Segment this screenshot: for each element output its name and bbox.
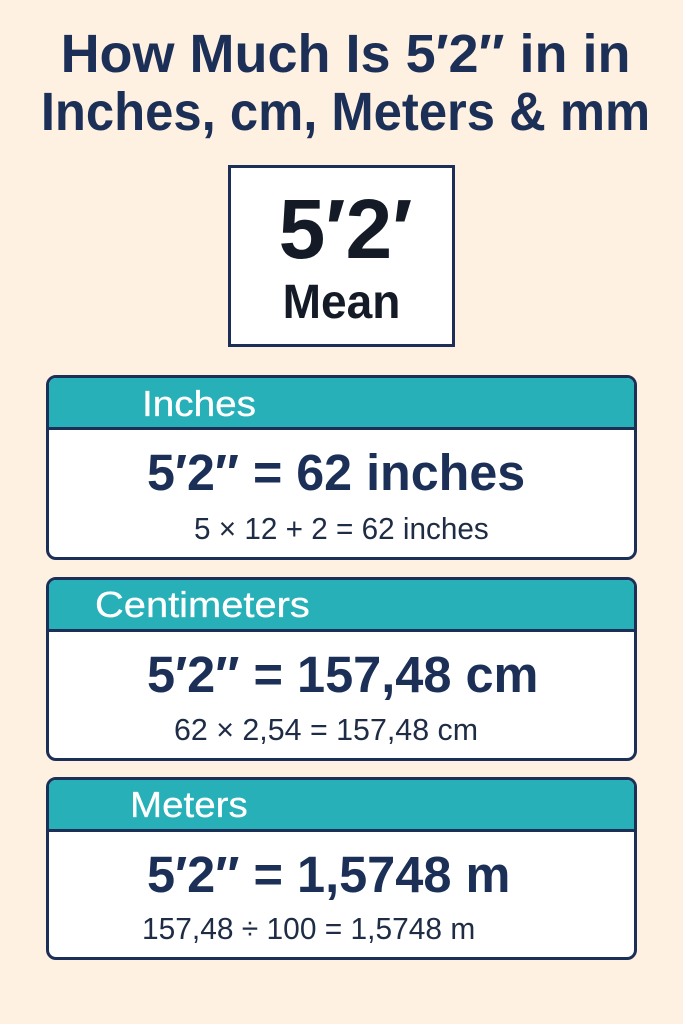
panel: centimeters <box>46 577 637 761</box>
panel: meters <box>46 777 637 960</box>
mean label: Mean <box>283 276 400 329</box>
centimeters formula: 62 × 2,54 = 157,48 cm <box>174 712 478 747</box>
meters header <box>49 780 634 832</box>
big height value: 5′2′ <box>279 182 412 276</box>
centimeters header <box>49 580 634 632</box>
inches result: 5′2″ = 62 inches <box>147 444 525 501</box>
inches formula: 5 × 12 + 2 = 62 inches <box>194 511 489 546</box>
meters result: 5′2″ = 1,5748 m <box>147 846 510 903</box>
panel: 5'2' mean box <box>228 165 455 347</box>
panel: inches <box>46 375 637 560</box>
centimeters result: 5′2″ = 157,48 cm <box>147 646 538 703</box>
meters header: Meters <box>130 784 248 825</box>
title: How Much Is 5′2″ in in <box>61 24 630 84</box>
title <box>41 24 650 142</box>
inches header: Inches <box>142 383 256 424</box>
inches header <box>49 378 634 430</box>
centimeters header: Centimeters <box>95 584 310 625</box>
title: Inches, cm, Meters & mm <box>41 82 650 142</box>
meters formula: 157,48 ÷ 100 = 1,5748 m <box>142 911 475 946</box>
